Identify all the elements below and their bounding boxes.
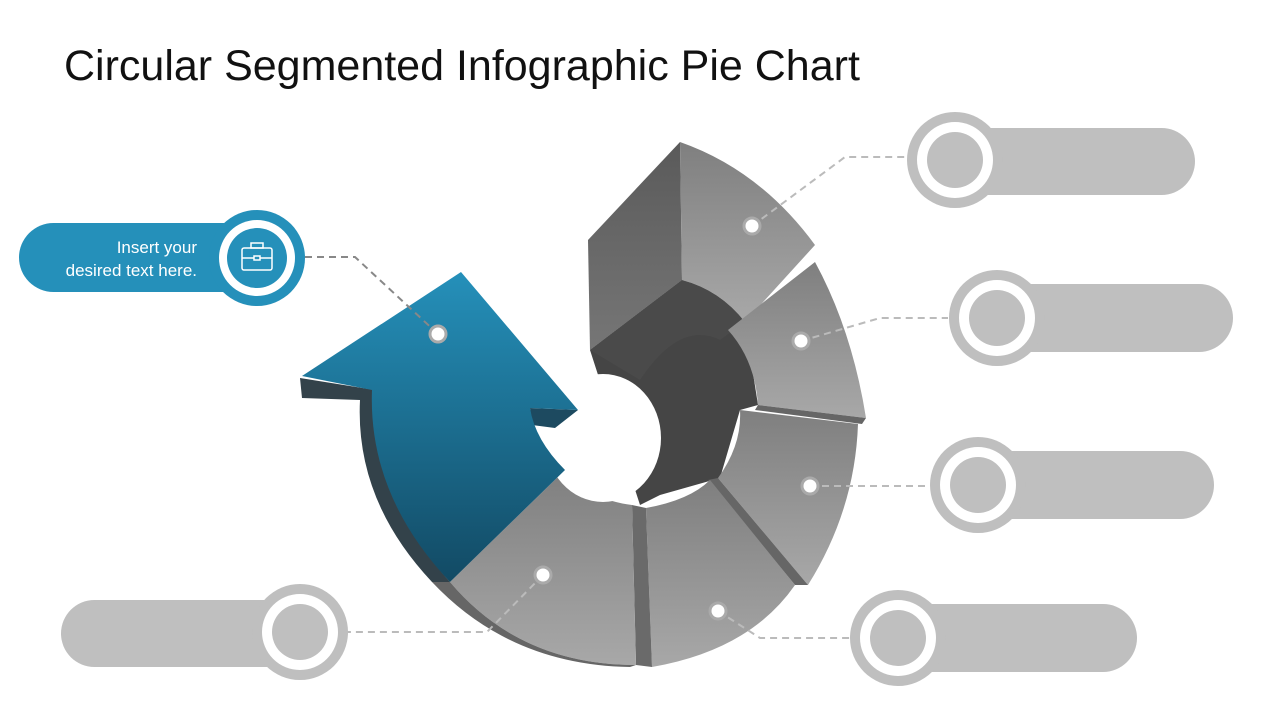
callout gray 5 (left) bbox=[61, 584, 348, 680]
inner dark wall bbox=[590, 280, 758, 505]
chart: segmented circular arrow bbox=[300, 142, 866, 667]
segment 4 bbox=[632, 480, 795, 667]
callout gray 3 bbox=[930, 437, 1214, 533]
segment 3 bbox=[708, 410, 858, 585]
callout blue: briefcase: desired text here. bbox=[66, 261, 197, 280]
callout blue: briefcase: Insert your bbox=[117, 238, 197, 257]
callout gray 2 bbox=[949, 270, 1233, 366]
title: Circular Segmented Infographic Pie Chart bbox=[64, 42, 860, 90]
icon: briefcase bbox=[242, 243, 272, 270]
connector lines bbox=[305, 157, 948, 638]
callout blue: briefcase bbox=[19, 210, 305, 306]
segment 5 bbox=[432, 470, 636, 667]
segment 2 bbox=[728, 262, 866, 424]
white hole bbox=[545, 374, 661, 502]
blue arrow bbox=[300, 272, 578, 582]
segment marker dots bbox=[430, 218, 818, 619]
callout gray 4 bbox=[850, 590, 1137, 686]
callout gray 1 bbox=[907, 112, 1195, 208]
segment 1 top block bbox=[588, 142, 815, 380]
